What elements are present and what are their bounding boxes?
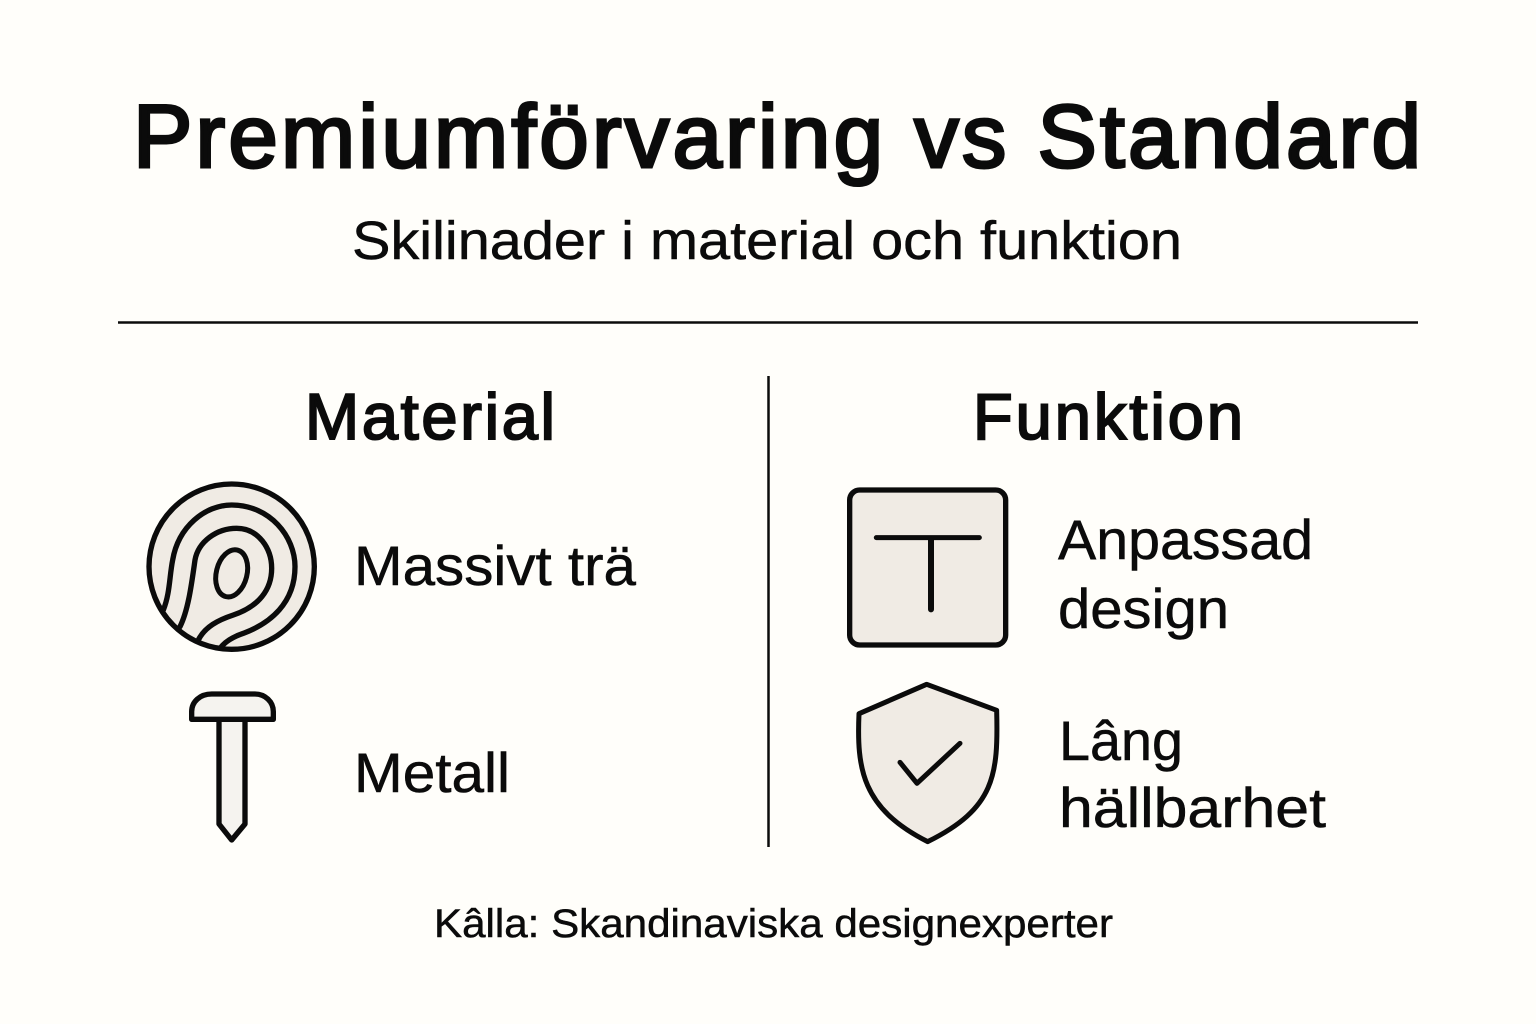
panel: funktion (850, 380, 1326, 842)
icon: custom design square (850, 490, 1006, 645)
icon: wood rings (149, 484, 314, 649)
icon: nail (192, 694, 273, 840)
heading: material: Material (305, 380, 555, 453)
subtitle: Skilinader i material och funktion (352, 211, 1182, 271)
label: lång hållbarhet: hällbarhet (1059, 776, 1326, 839)
label: massivt trä: Massivt trä (354, 534, 637, 597)
label: anpassad design: Anpassad (1058, 508, 1313, 571)
label: anpassad design: design (1058, 577, 1229, 640)
heading: funktion: Funktion (973, 380, 1243, 453)
title: Premiumförvaring vs Standard (133, 86, 1421, 186)
label: metall: Metall (354, 741, 510, 804)
panel: material (149, 380, 637, 840)
source: Kâlla: Skandinaviska designexperter (434, 902, 1113, 946)
label: lång hållbarhet: Lâng (1059, 709, 1183, 772)
icon: shield with check (859, 684, 997, 842)
